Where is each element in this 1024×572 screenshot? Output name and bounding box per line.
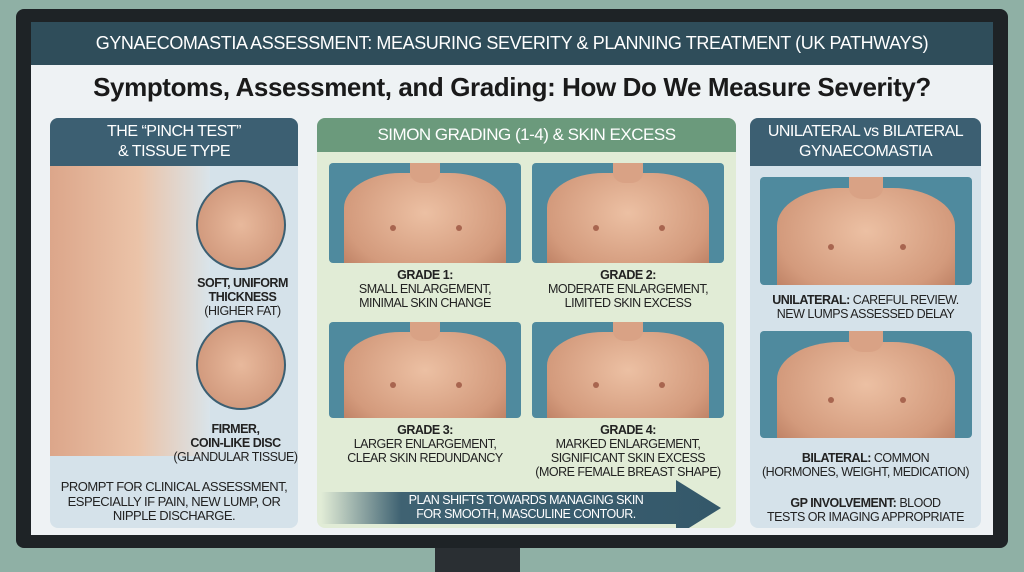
photo grade 4 xyxy=(532,322,724,418)
arrow: PLAN SHIFTS TOWARDS MANAGING SKIN xyxy=(409,493,643,507)
panel: unilateral vs bilateral xyxy=(750,118,981,528)
heading xyxy=(317,118,736,152)
text GP xyxy=(767,496,964,524)
caption grade 4: (MORE FEMALE BREAST SHAPE) xyxy=(535,465,721,479)
icon: zoom circle firm xyxy=(196,320,286,410)
photo: torso xyxy=(50,166,210,456)
caption grade 1: GRADE 1: xyxy=(397,268,453,282)
caption grade 4: SIGNIFICANT SKIN EXCESS xyxy=(551,451,705,465)
monitor stand xyxy=(435,545,520,572)
arrow: FOR SMOOTH, MASCULINE CONTOUR. xyxy=(416,507,636,521)
caption grade 4 xyxy=(535,423,721,479)
title bar: GYNAECOMASTIA ASSESSMENT: MEASURING SEVERITY & PLANNING TREATMENT (UK PATHWAYS) xyxy=(96,33,928,53)
caption grade 4: MARKED ENLARGEMENT, xyxy=(556,437,700,451)
text: firm: FIRMER, xyxy=(212,422,259,436)
text bilateral xyxy=(762,451,969,479)
heading: SIMON GRADING (1-4) & SKIN EXCESS xyxy=(377,125,676,144)
photo unilateral xyxy=(760,177,972,285)
text: prompt: PROMPT FOR CLINICAL ASSESSMENT, ESPECIALLY IF PAIN, NEW LUMP, OR NIPPLE DISCHARGE. xyxy=(61,479,287,523)
caption grade 1: MINIMAL SKIN CHANGE xyxy=(359,296,491,310)
text GP: GP INVOLVEMENT: BLOOD xyxy=(790,496,941,510)
caption grade 3: LARGER ENLARGEMENT, xyxy=(354,437,496,451)
text bilateral: (HORMONES, WEIGHT, MEDICATION) xyxy=(762,465,969,479)
heading: & TISSUE TYPE xyxy=(118,143,230,160)
text unilateral: NEW LUMPS ASSESSED DELAY xyxy=(777,307,954,321)
heading: THE “PINCH TEST” xyxy=(107,123,241,140)
text unilateral xyxy=(772,293,959,321)
arrow xyxy=(325,480,721,528)
text GP: TESTS OR IMAGING APPROPRIATE xyxy=(767,510,964,524)
text: firm: (GLANDULAR TISSUE) xyxy=(173,450,298,464)
subtitle: Symptoms, Assessment, and Grading: How Do We Measure Severity? xyxy=(93,72,931,102)
text: soft: SOFT, UNIFORM THICKNESS xyxy=(197,276,288,304)
photo grade 2 xyxy=(532,163,724,263)
photo grade 1 xyxy=(329,163,521,263)
caption grade 1: SMALL ENLARGEMENT, xyxy=(359,282,491,296)
caption grade 2: LIMITED SKIN EXCESS xyxy=(565,296,691,310)
icon: zoom circle soft xyxy=(196,180,286,270)
text unilateral: UNILATERAL: CAREFUL REVIEW. xyxy=(772,293,959,307)
caption grade 3 xyxy=(347,423,503,465)
text: soft: (HIGHER FAT) xyxy=(204,304,281,318)
text: soft xyxy=(197,276,288,318)
photo bilateral xyxy=(760,331,972,438)
panel: simon grading xyxy=(317,118,736,528)
heading xyxy=(50,118,298,166)
caption grade 1 xyxy=(359,268,491,310)
text bilateral: BILATERAL: COMMON xyxy=(802,451,929,465)
caption grade 3: CLEAR SKIN REDUNDANCY xyxy=(347,451,503,465)
heading: GYNAECOMASTIA xyxy=(799,143,932,160)
photo grade 3 xyxy=(329,322,521,418)
heading xyxy=(750,118,981,166)
heading: UNILATERAL vs BILATERAL xyxy=(768,123,963,140)
caption grade 2 xyxy=(548,268,708,310)
caption grade 2: GRADE 2: xyxy=(600,268,656,282)
panel: pinch test xyxy=(50,118,298,528)
caption grade 3: GRADE 3: xyxy=(397,423,453,437)
text: firm: COIN-LIKE DISC xyxy=(190,436,281,450)
caption grade 4: GRADE 4: xyxy=(600,423,656,437)
title bar xyxy=(31,22,993,65)
text: firm xyxy=(173,422,298,464)
caption grade 2: MODERATE ENLARGEMENT, xyxy=(548,282,708,296)
